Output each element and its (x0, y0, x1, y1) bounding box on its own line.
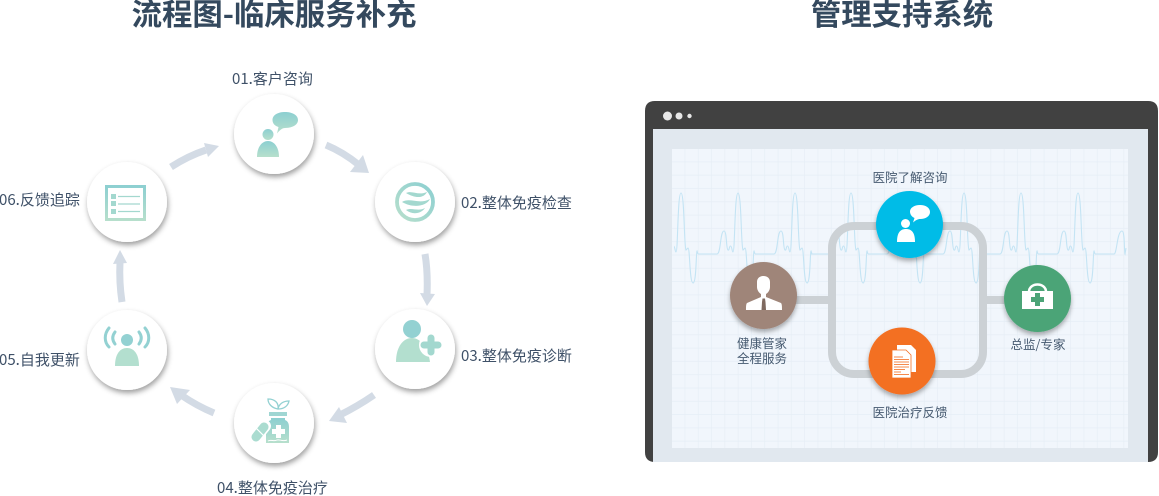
node: hospital consultation (872, 167, 948, 258)
inner screen (653, 129, 1148, 462)
label: 医院治疗反馈 (872, 402, 948, 421)
grid paper (672, 149, 1128, 448)
circle (1004, 265, 1071, 332)
label: 05.自我更新 (0, 349, 80, 370)
circle (876, 191, 943, 258)
icon: person with signal waves (105, 328, 149, 366)
arrow: step 1 to 2 (326, 145, 369, 173)
step 01 (232, 68, 314, 174)
monitor frame (645, 101, 1158, 462)
label: 06.反馈追踪 (0, 189, 80, 210)
icon: checklist (106, 186, 144, 220)
icon: person with speech bubble (257, 112, 298, 157)
icon: water ring (397, 184, 433, 220)
node: director / expert (1004, 265, 1071, 353)
label: 01.客户咨询 (232, 68, 313, 89)
circle (234, 383, 314, 463)
label: 总监/专家 (1011, 334, 1066, 353)
circle (234, 94, 314, 174)
icon: documents (892, 345, 916, 378)
label: 全程服务 (737, 348, 787, 367)
icon: medicine bottle and sprout (256, 399, 289, 443)
connector lines (795, 226, 1006, 374)
icon: person with plus (396, 320, 443, 362)
step 02 (375, 162, 572, 242)
icon: businessman (746, 276, 782, 310)
icon: person with bubble (897, 205, 930, 242)
circle (730, 262, 797, 329)
arrow: step 6 to 1 (171, 143, 219, 167)
cycle flow diagram (0, 68, 572, 496)
ECG line (641, 193, 1126, 283)
circle (87, 310, 167, 390)
panel: monitor window (641, 101, 1158, 462)
label: 02.整体免疫检查 (461, 192, 572, 213)
node: hospital treatment feedback (868, 328, 948, 421)
step 04 (217, 383, 328, 496)
step 03 (375, 309, 572, 389)
window dots (663, 112, 692, 120)
icon: medical case (1022, 284, 1053, 309)
node: health manager (730, 262, 797, 367)
arrow: step 3 to 4 (329, 395, 374, 423)
arrow: step 2 to 3 (420, 254, 435, 306)
circle (87, 162, 167, 242)
step 06 (0, 162, 167, 242)
label: 健康管家 (737, 333, 787, 352)
arrow: step 5 to 6 (113, 250, 127, 302)
arrow: step 4 to 5 (170, 387, 214, 413)
circle (375, 162, 455, 242)
label: 医院了解咨询 (872, 167, 948, 186)
step 05 (0, 310, 167, 390)
circle (375, 309, 455, 389)
circle (868, 328, 936, 394)
label: 03.整体免疫诊断 (461, 345, 572, 366)
